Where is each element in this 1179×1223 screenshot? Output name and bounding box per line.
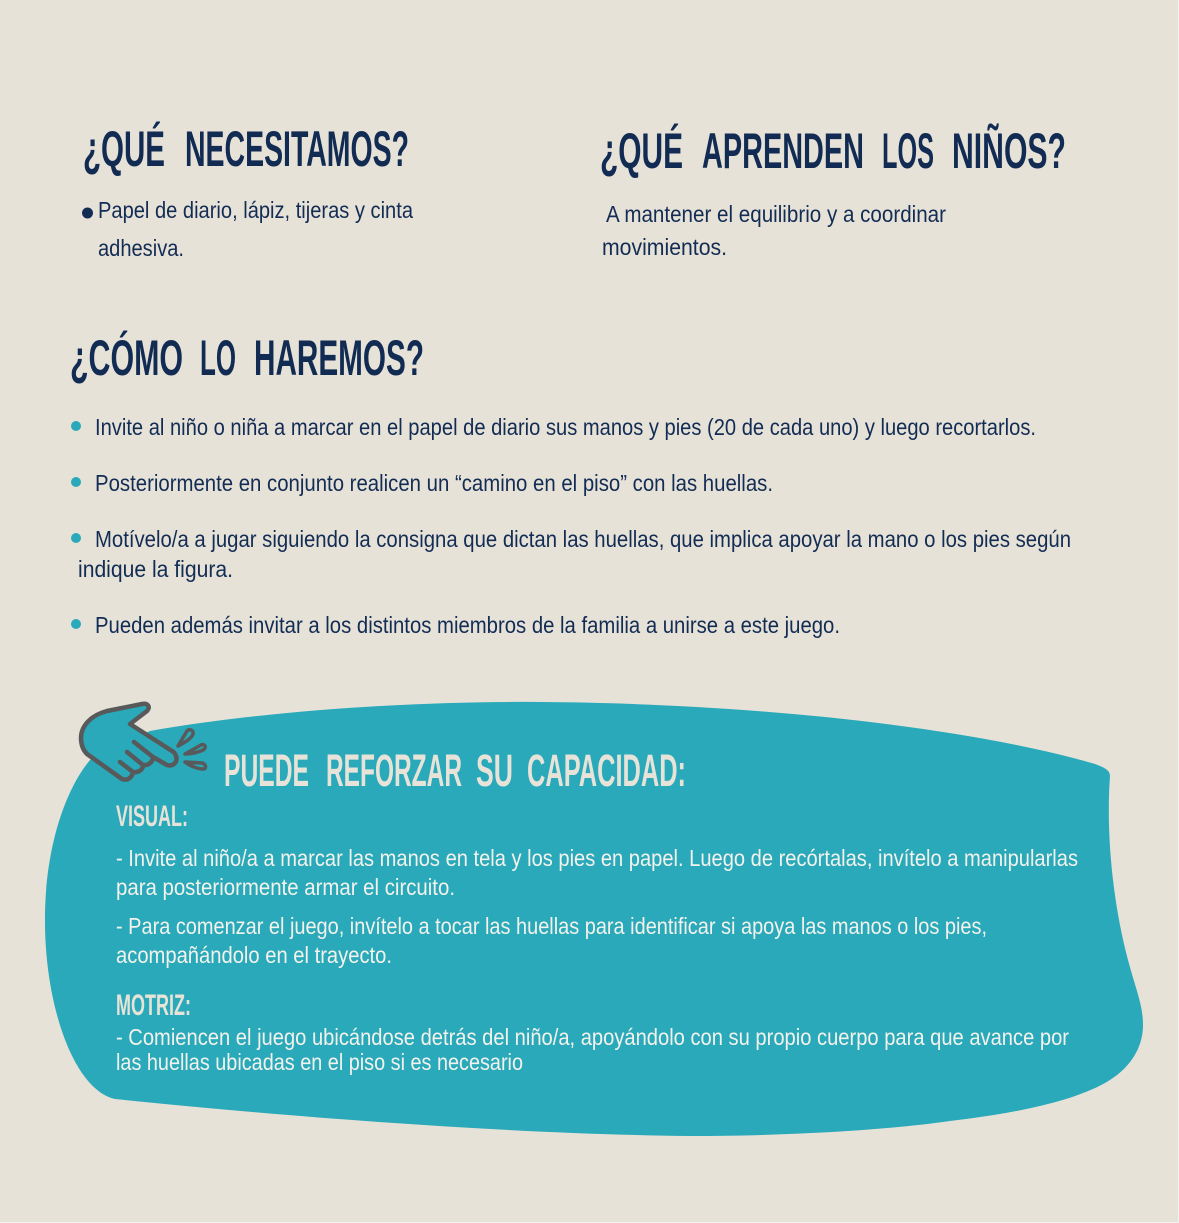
step 3: Motívelo/a a jugar siguiendo la consigna que dictan las huellas, que implica apoyar la mano o los pies según	[95, 526, 1071, 552]
step 4: Pueden además invitar a los distintos miembros de la familia a unirse a este juego.	[95, 612, 840, 638]
text: what children learn	[602, 201, 946, 260]
heading: qué necesitamos: ¿QUÉ	[83, 121, 165, 177]
bullet: materials	[82, 208, 93, 218]
heading: puede reforzar su capacidad	[224, 745, 686, 796]
subheading: visual: VISUAL:	[116, 800, 188, 833]
heading: puede reforzar su capacidad: PUEDE	[224, 745, 309, 796]
panel: steps list	[71, 414, 1071, 638]
text: motor tips: las huellas ubicadas en el piso si es necesario	[116, 1049, 523, 1075]
text: visual tips: para posteriormente armar el circuito.	[116, 874, 455, 900]
text: materials: adhesiva.	[98, 235, 184, 261]
heading: qué aprenden los niños	[600, 123, 1066, 179]
text: motor tips: - Comiencen el juego ubicándose detrás del niño/a, apoyándolo con su propio cuerpo para que avance por	[116, 1024, 1069, 1050]
heading: qué aprenden los niños: APRENDEN	[702, 123, 864, 179]
text: motor tips	[116, 1024, 1069, 1075]
panel: materials list	[82, 197, 413, 261]
heading: qué necesitamos	[83, 121, 409, 177]
text: visual tips: acompañándolo en el trayecto.	[116, 942, 392, 968]
heading: cómo lo haremos: HAREMOS?	[254, 330, 424, 386]
text: visual tips: - Para comenzar el juego, invítelo a tocar las huellas para identificar si apoya las manos o los pies,	[116, 913, 987, 939]
heading: qué aprenden los niños: NIÑOS?	[952, 123, 1066, 179]
subheading: motriz: MOTRIZ:	[116, 989, 191, 1022]
text: visual tips	[116, 845, 1078, 968]
step 3	[71, 526, 1071, 582]
text: what children learn: movimientos.	[602, 234, 727, 260]
heading: qué aprenden los niños: LOS	[882, 123, 934, 179]
step 2: Posteriormente en conjunto realicen un “camino en el piso” con las huellas.	[95, 470, 773, 496]
text: what children learn: A mantener el equilibrio y a coordinar	[606, 201, 946, 227]
step 1: Invite al niño o niña a marcar en el papel de diario sus manos y pies (20 de cada uno) y luego recortarlos.	[95, 414, 1036, 440]
heading: puede reforzar su capacidad: CAPACIDAD:	[527, 745, 686, 796]
heading: cómo lo haremos	[70, 330, 424, 386]
heading: cómo lo haremos: ¿CÓMO	[70, 330, 183, 386]
heading: puede reforzar su capacidad: REFORZAR	[326, 745, 462, 796]
heading: puede reforzar su capacidad: SU	[476, 745, 513, 796]
heading: qué necesitamos: NECESITAMOS?	[185, 121, 409, 177]
heading: qué aprenden los niños: ¿QUÉ	[600, 123, 683, 179]
step 3: indique la figura.	[78, 556, 233, 582]
text: materials	[98, 197, 413, 261]
panel: teal blob	[45, 702, 1143, 1136]
heading: cómo lo haremos: LO	[200, 330, 236, 386]
text: materials: Papel de diario, lápiz, tijeras y cinta	[98, 197, 413, 223]
icon: pointing hand	[81, 704, 206, 780]
